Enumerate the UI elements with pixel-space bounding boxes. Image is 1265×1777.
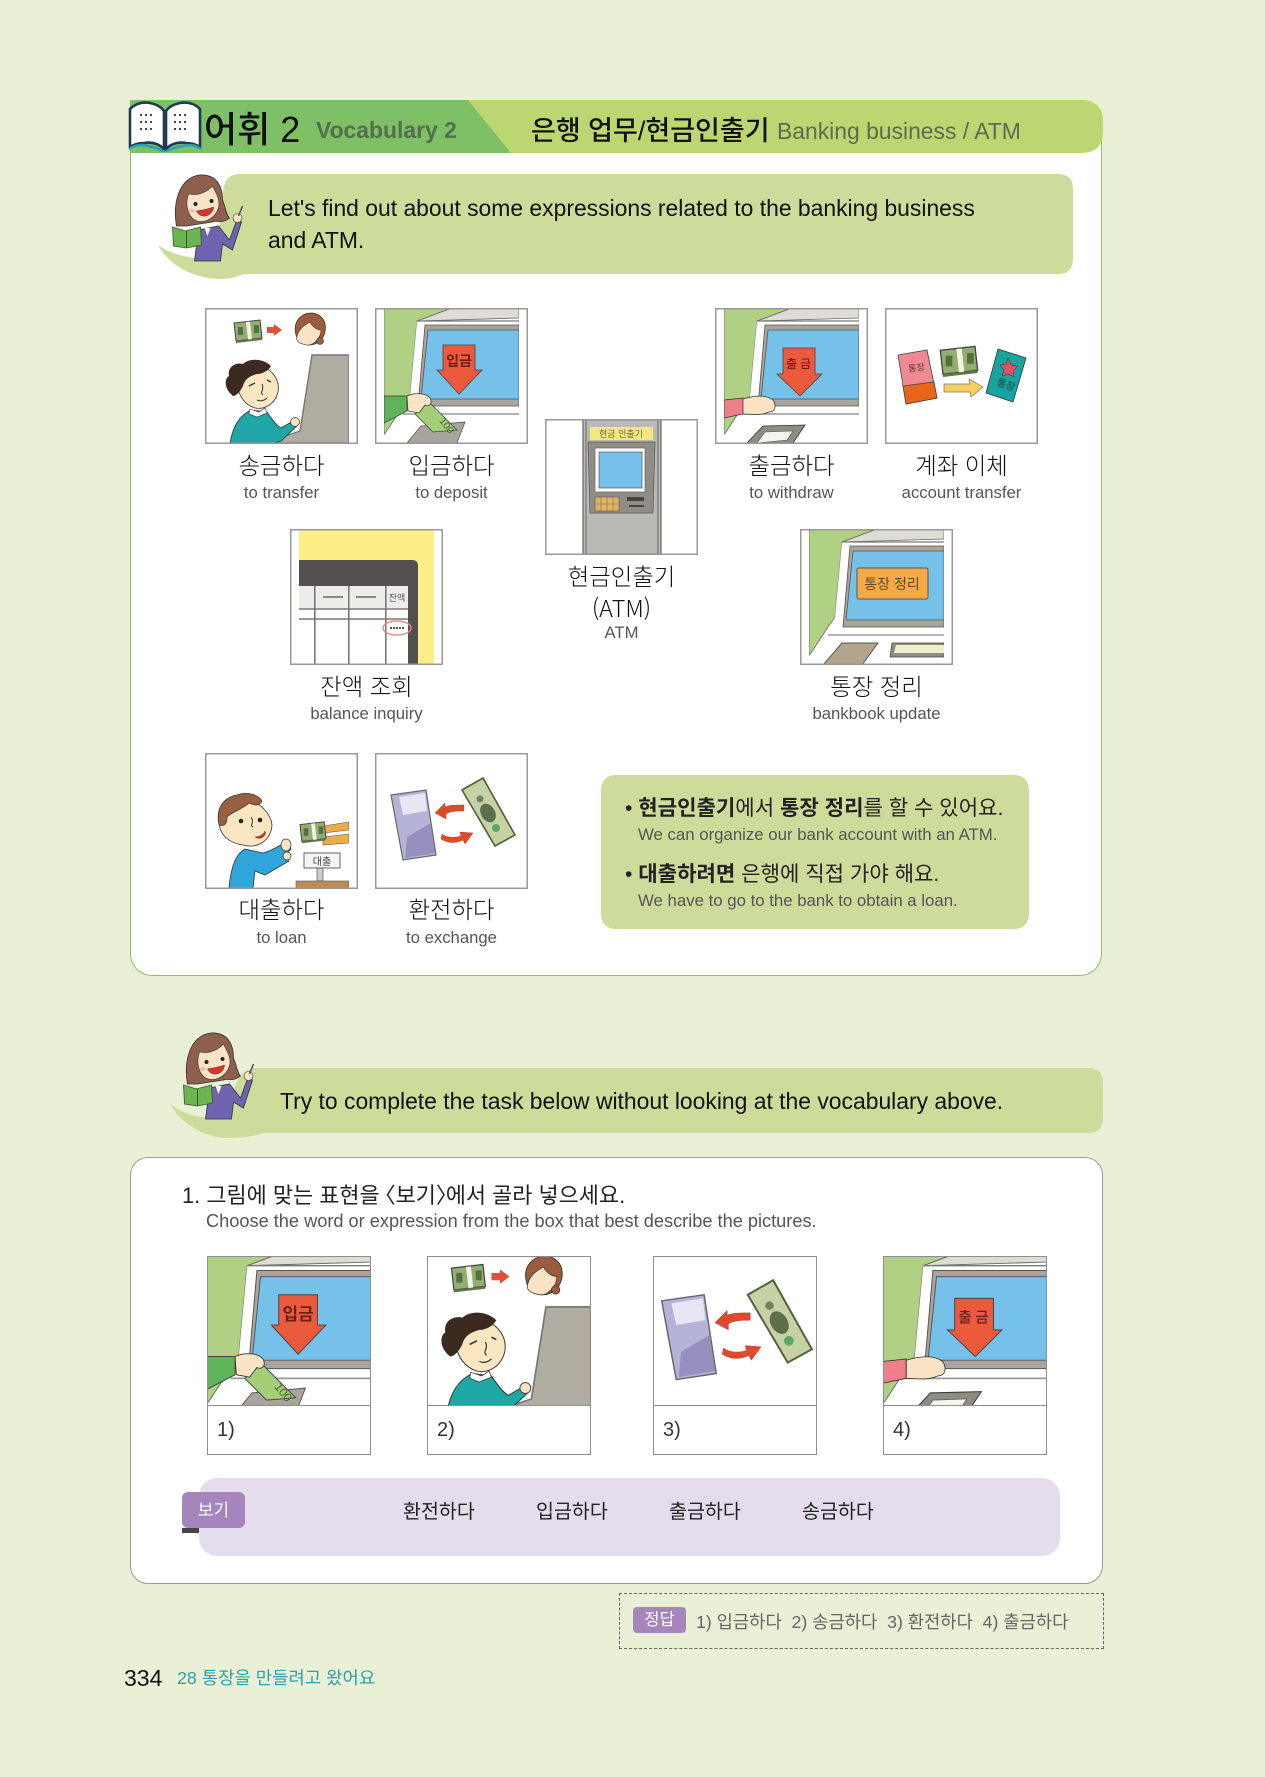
panel: exercise <box>130 1157 1103 1584</box>
image: withdrawing cash: 출금 <box>786 355 814 372</box>
english label: balance inquiry <box>310 704 423 723</box>
image: ATM machine <box>545 419 698 555</box>
image: withdrawing cash <box>715 308 868 444</box>
english label: account transfer <box>902 483 1021 502</box>
example 1 english: We can organize our bank account with an ATM. <box>638 825 997 844</box>
number: 4) <box>893 1419 911 1441</box>
english label: to transfer <box>244 483 319 502</box>
image: depositing cash: 입금 <box>446 351 472 371</box>
image: bankbooks and money: 통장 <box>907 360 926 375</box>
quiz item 3 <box>653 1256 817 1455</box>
word box: 보기 <box>182 1478 1060 1556</box>
image: transfer <box>441 1257 590 1405</box>
quiz item 1 <box>207 1256 371 1455</box>
heading: banking business: 은행 업무/현금인출기 <box>531 116 770 146</box>
korean label: 입금하다 <box>408 453 495 479</box>
header band <box>130 100 1103 153</box>
vocab: to deposit <box>375 308 528 502</box>
number: 3) <box>663 1419 681 1441</box>
example 1 korean: • 현금인출기에서 통장 정리를 할 수 있어요. <box>625 797 1003 820</box>
intro text <box>268 195 975 253</box>
image: bankbook update screen: 통장 정리 <box>864 574 920 594</box>
answer badge <box>633 1607 686 1633</box>
word options: 입금하다 <box>536 1501 608 1523</box>
icon: teacher pointing <box>183 1032 254 1120</box>
korean label: 송금하다 <box>238 453 325 479</box>
image: withdraw <box>884 1257 1046 1405</box>
question 1 korean: 1. 그림에 맞는 표현을 〈보기〉에서 골라 넣으세요. <box>182 1183 625 1208</box>
heading: Vocabulary 2: Vocabulary 2 <box>316 117 457 143</box>
vocab: account transfer <box>885 308 1038 502</box>
korean label: 계좌 이체 <box>915 453 1008 479</box>
frame <box>653 1256 817 1455</box>
task text: Try to complete the task below without looking at the vocabulary above. <box>280 1088 1003 1114</box>
image: won and dollar exchange <box>375 753 528 889</box>
word options <box>403 1501 874 1523</box>
vocab: ATM <box>545 419 698 642</box>
icon: teacher pointing <box>172 174 244 262</box>
english label: to exchange <box>406 928 497 947</box>
word options: 환전하다 <box>403 1501 475 1523</box>
english label: to deposit <box>415 483 488 502</box>
image: man receiving loan <box>205 753 358 889</box>
footer: chapter title: 28 통장을 만들려고 왔어요 <box>177 1668 375 1688</box>
intro text: and ATM. <box>268 227 364 253</box>
quiz item 2 <box>427 1256 591 1455</box>
korean label: 대출하다 <box>238 897 325 923</box>
image: man at ATM sending money <box>205 308 358 444</box>
image: exchange <box>660 1279 814 1380</box>
korean label: 환전하다 <box>408 897 495 923</box>
intro text: Let's find out about some expressions related to the banking business <box>268 195 975 221</box>
example 2 english: We have to go to the bank to obtain a loan. <box>638 891 958 910</box>
image: depositing cash <box>375 308 528 444</box>
image: deposit: 입금 <box>282 1300 314 1325</box>
vocab: to loan <box>205 753 358 947</box>
panel: vocabulary 2 <box>130 100 1103 976</box>
question 1 english: Choose the word or expression from the box that best describe the pictures. <box>206 1211 817 1231</box>
answer box <box>619 1593 1104 1649</box>
word options: 출금하다 <box>669 1501 741 1523</box>
heading: 어휘 2: 어휘 2 <box>204 109 300 150</box>
korean label: 현금인출기 <box>568 564 675 590</box>
image: bankbooks and money: 통장 <box>995 374 1017 394</box>
korean label: 잔액 조회 <box>320 674 413 700</box>
badge: 보기 <box>198 1501 229 1520</box>
word options: 송금하다 <box>802 1501 874 1523</box>
korean label <box>568 564 675 624</box>
image: balance on bankbook <box>290 529 443 665</box>
english label: to loan <box>256 928 307 947</box>
answer badge: 정답 <box>644 1611 675 1629</box>
example 2 korean: • 대출하려면 은행에 직접 가야 해요. <box>625 863 939 886</box>
vocab: to transfer <box>205 308 358 502</box>
image: ATM machine: 현금 인출기 <box>599 427 643 440</box>
quiz item 4 <box>883 1256 1047 1455</box>
english label: bankbook update <box>812 704 941 723</box>
icon: open book <box>128 101 202 152</box>
image: bankbooks and money <box>885 308 1038 444</box>
answers: 1) 입금하다 2) 송금하다 3) 환전하다 4) 출금하다 <box>696 1612 1068 1632</box>
number: 2) <box>437 1419 455 1441</box>
korean label: 통장 정리 <box>830 674 923 700</box>
vocab: bankbook update <box>800 529 953 723</box>
heading: english subtitle: Banking business / ATM <box>777 118 1021 144</box>
callout: example sentences <box>601 775 1029 929</box>
vocab: to exchange <box>375 753 528 947</box>
frame <box>883 1256 1047 1455</box>
image: deposit <box>208 1257 370 1405</box>
frame <box>427 1256 591 1455</box>
english label: ATM <box>604 623 638 642</box>
image: bankbook update screen <box>800 529 953 665</box>
korean label: 출금하다 <box>748 453 835 479</box>
vocab: balance inquiry <box>290 529 443 723</box>
panel body <box>130 130 1102 976</box>
number: 1) <box>217 1419 235 1441</box>
vocab: to withdraw <box>715 308 868 502</box>
image: withdraw: 출금 <box>958 1307 992 1328</box>
korean label: (ATM) <box>592 590 651 624</box>
image: balance on bankbook: 잔액 <box>389 591 405 604</box>
frame <box>207 1256 371 1455</box>
english label: to withdraw <box>749 483 834 502</box>
image: man receiving loan: 대출 <box>313 853 331 868</box>
callout: task instruction bubble <box>170 1068 1103 1138</box>
callout: intro speech bubble <box>158 174 1073 279</box>
footer: page number: 334 <box>124 1665 162 1691</box>
badge <box>182 1492 245 1528</box>
